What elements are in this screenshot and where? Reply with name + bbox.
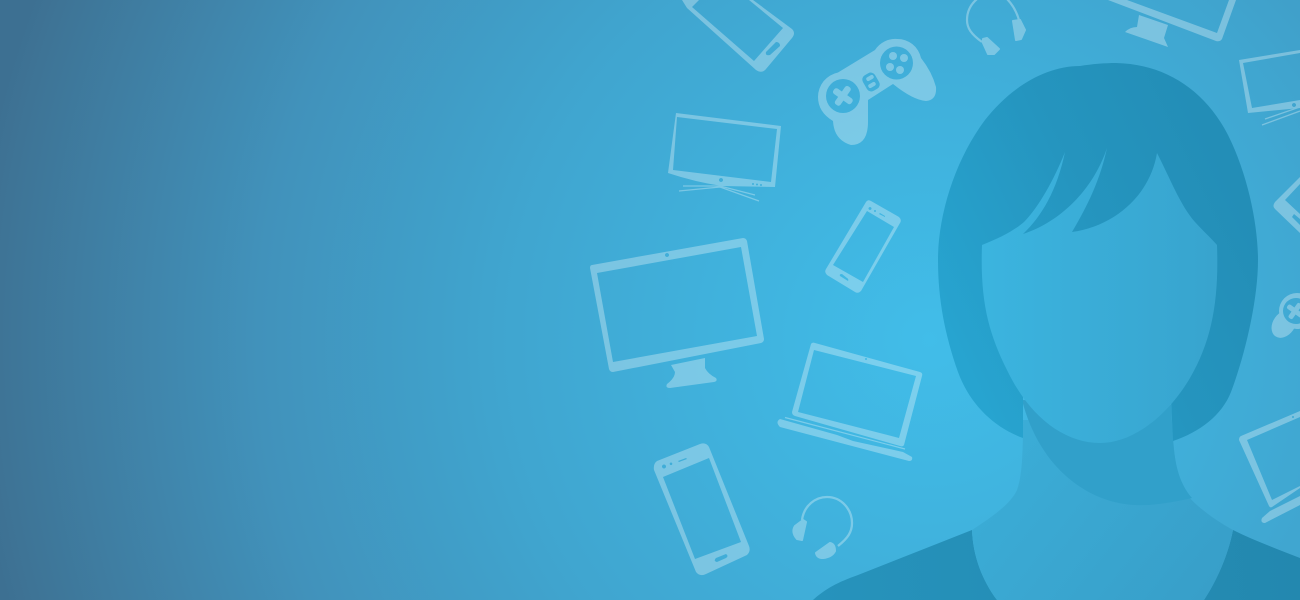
person silhouette [813,63,1300,600]
icon: phone cropped at top [682,0,794,72]
icon: game controller [818,39,936,145]
illustration: person and devices [590,0,1300,600]
icon: small phone [825,200,901,293]
icon: monitor top right [1108,0,1236,47]
left shoulder [813,530,997,600]
shirt and neck [972,420,1233,600]
icon: headphones lower [793,497,852,558]
icon: laptop [778,343,922,461]
icon: controller right edge [1272,293,1300,338]
icon: large monitor [590,238,764,388]
icon: phone right edge [1274,177,1300,233]
icon: large phone [654,443,750,575]
icon: headphones upper [967,0,1025,54]
icon: laptop right edge [1239,411,1300,523]
face [982,148,1217,443]
hair [938,63,1258,441]
neck shadow [1022,400,1192,505]
icon: television right edge [1239,50,1300,125]
right shoulder [1204,530,1300,600]
icon: television [668,113,781,201]
